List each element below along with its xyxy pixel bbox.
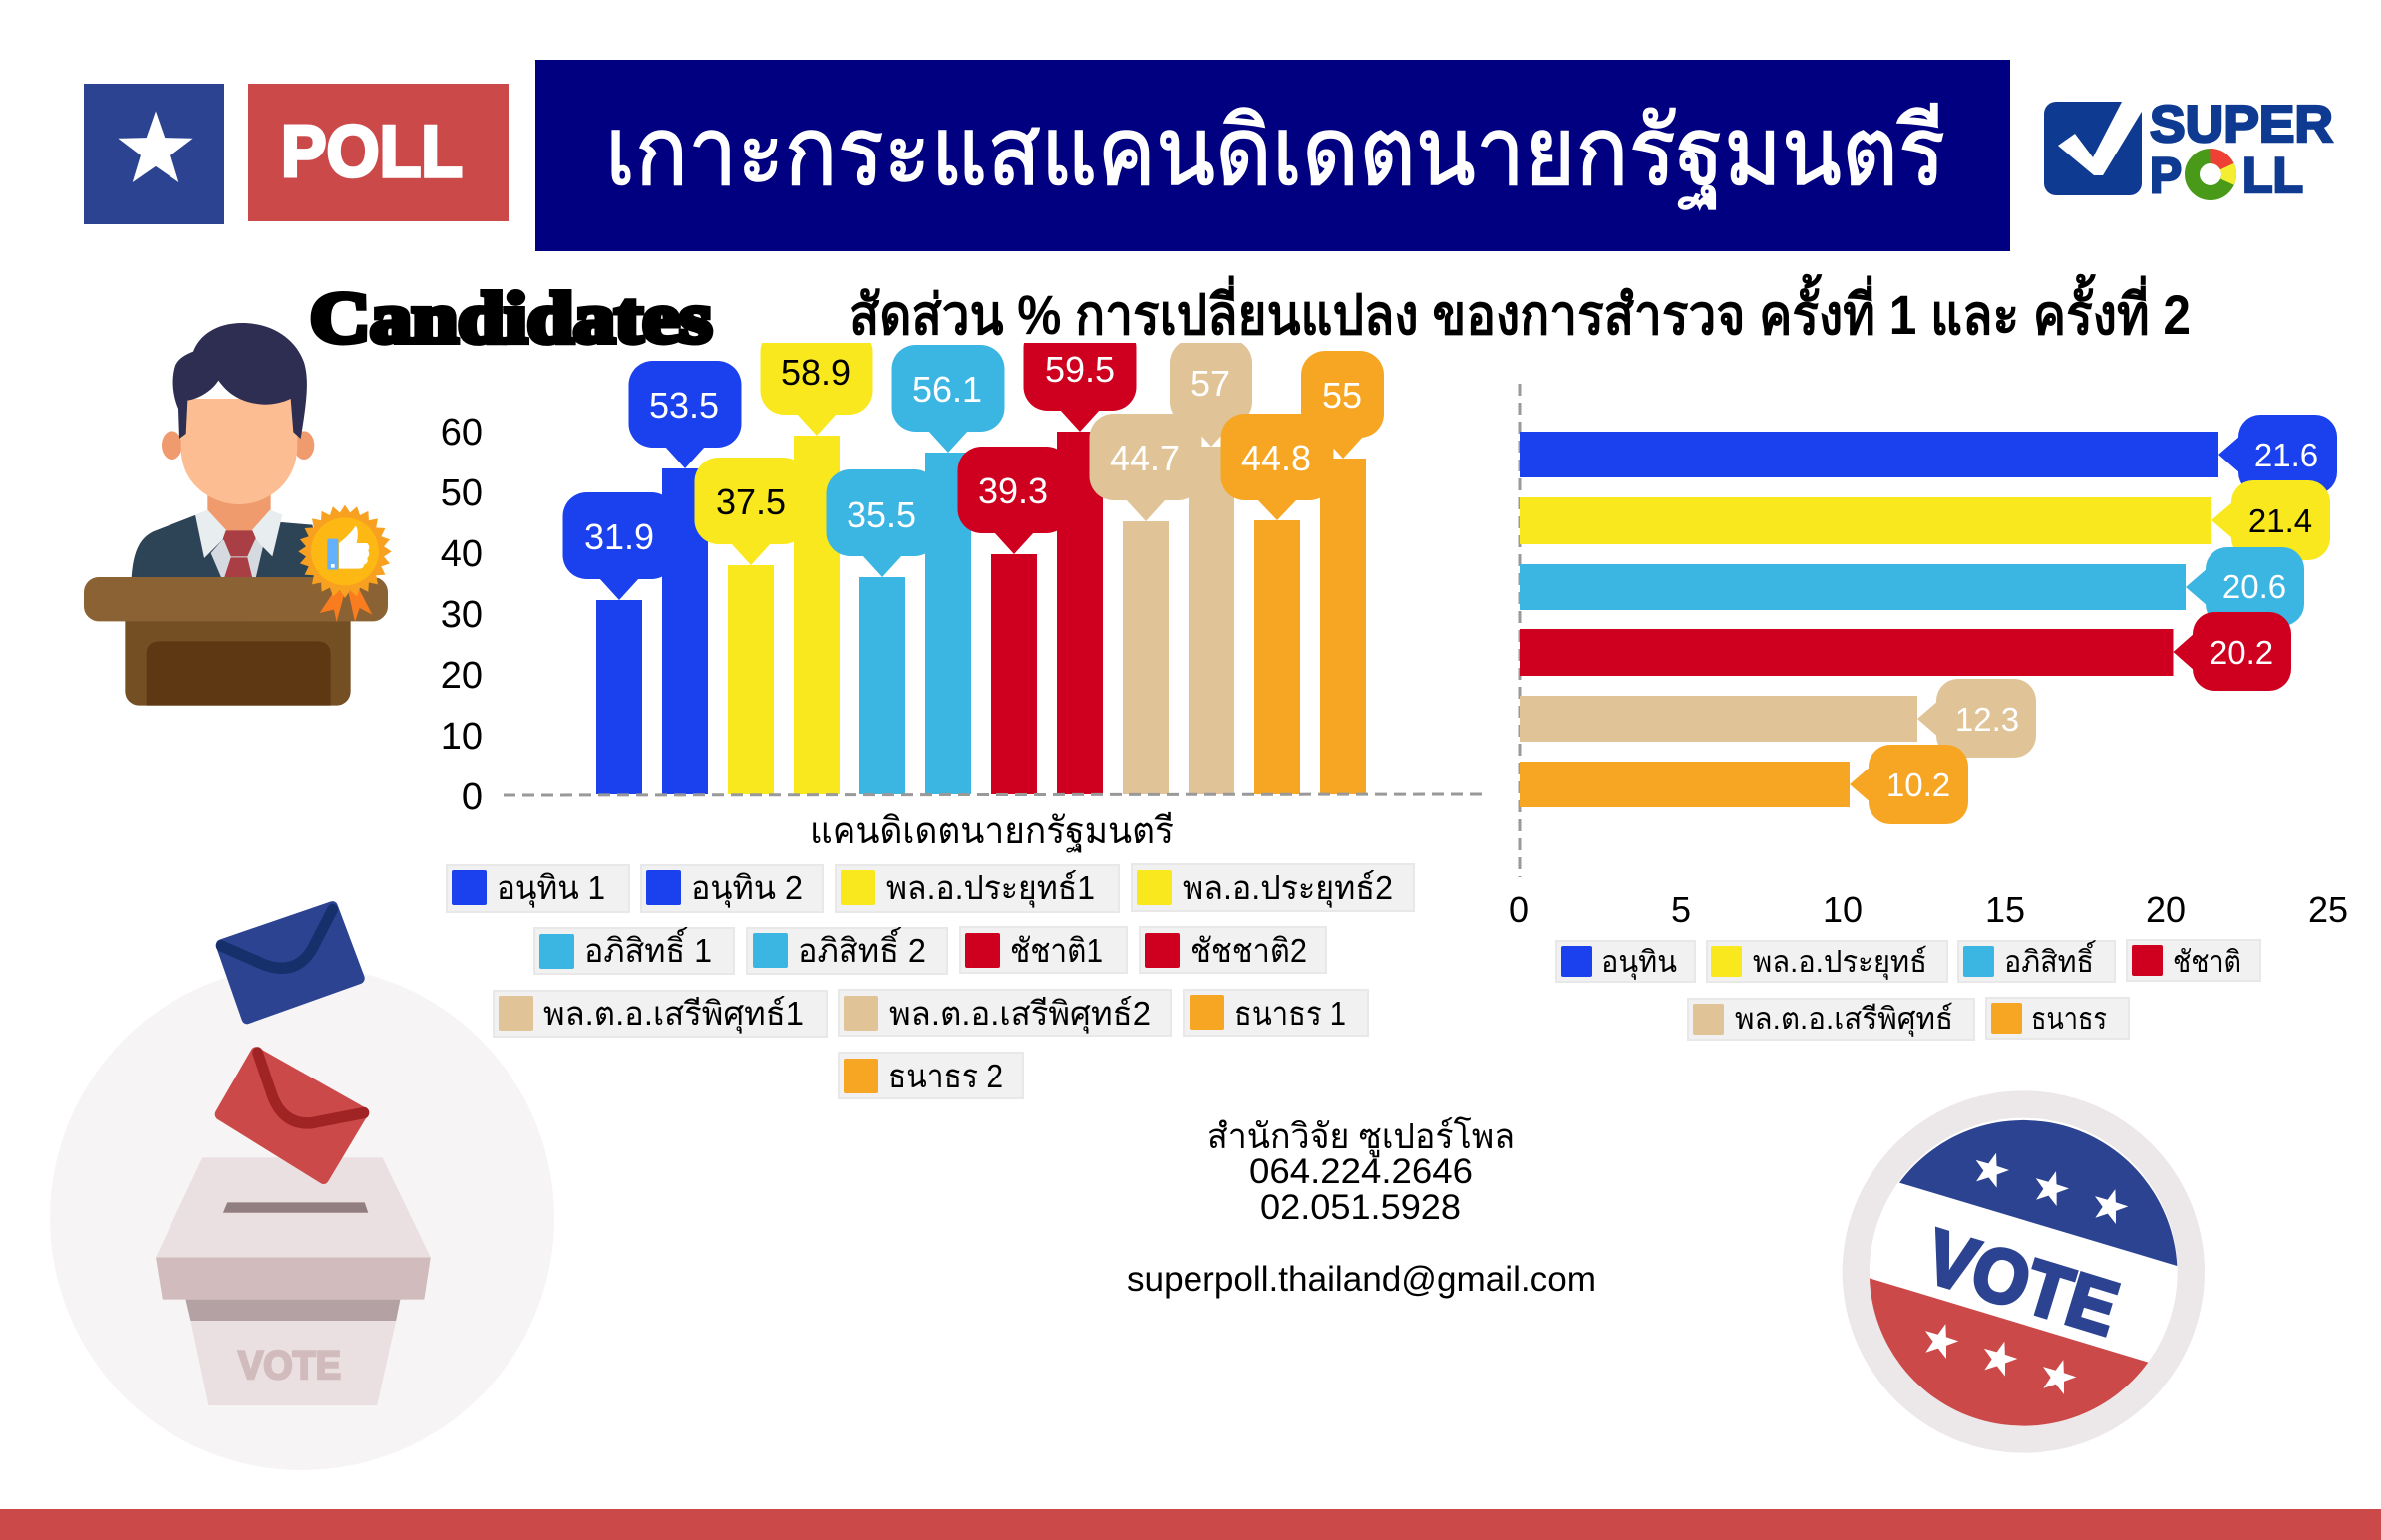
logo: super poll: SUPER (2150, 96, 2333, 154)
bar: Seripisut 1: 44.7 (1110, 438, 1180, 478)
bar: Thanathorn 2: 55 (1322, 375, 1362, 416)
heading: Candidates: Candidates (310, 278, 712, 358)
chart axis: column baseline and values: 30 (441, 594, 483, 636)
legend item: Anutin: อนุทิน (1601, 946, 1677, 981)
bar: Thanathorn 1: 44.8 (1241, 438, 1311, 478)
legend item: Seripisut 2: พล.ต.อ.เสรีพิศุทธ์2 (889, 995, 1151, 1034)
horizontal bar: Abhisit: 20.6 (2222, 568, 2286, 605)
legend item: Thanathorn 2: ธนาธร 2 (888, 1058, 1003, 1094)
legend item: Prayut (1707, 941, 1947, 982)
title banner (535, 60, 2010, 251)
badge: star poll box (84, 84, 224, 224)
legend item: Chadchart 1: ชัชาติ1 (1010, 932, 1103, 969)
legend item: Chadchart: ชัชาติ (2173, 946, 2241, 979)
icon: vote badge: VOTE (1916, 1214, 2127, 1352)
horizontal bar: Abhisit (1520, 547, 2304, 626)
legend item: Abhisit: อภิสิทธิ์ (2004, 940, 2097, 979)
footer bar (0, 1509, 2381, 1540)
horizontal bar: Thanathorn (1520, 745, 1968, 824)
horizontal bar: Seripisut: 12.3 (1955, 701, 2019, 738)
legend item: Prayut 1: พล.อ.ประยุทธ์1 (886, 869, 1095, 908)
chart axis: horizontal values (1509, 889, 2348, 930)
bar: Chadchart 1: 39.3 (978, 470, 1048, 511)
bar: Prayut 1: 37.5 (716, 481, 786, 522)
bar: Chadchart 1 (957, 447, 1057, 794)
logo: super poll: P (2150, 148, 2182, 203)
legend item: Thanathorn: ธนาธร (2031, 1003, 2107, 1036)
badge: POLL label (248, 84, 509, 221)
legend item: Thanathorn (1986, 998, 2129, 1039)
bar: Chadchart 2: 59.5 (1045, 349, 1115, 390)
contact block (1127, 1116, 1596, 1299)
icon: ballot box with envelopes: VOTE (238, 1344, 341, 1387)
horizontal bar: Anutin: 21.6 (2254, 437, 2318, 473)
legend item: Abhisit 2: อภิสิทธิ์ 2 (798, 927, 926, 969)
chart axis: column baseline and values: 10 (441, 716, 483, 758)
legend item: Prayut 2: พล.อ.ประยุทธ์2 (1183, 869, 1393, 908)
legend item: Abhisit 1 (534, 927, 734, 974)
chart axis: horizontal values: 25 (2308, 889, 2348, 930)
title banner: เกาะกระแสแคนดิเดตนายกรัฐมนตรี (605, 99, 1945, 210)
legend item: Chadchart (2127, 940, 2260, 981)
legend item: Chadchart 1 (960, 927, 1127, 973)
bar: Anutin 2: 53.5 (649, 385, 719, 426)
legend item: Seripisut: พล.ต.อ.เสรีพิศุทธ์ (1735, 1002, 1953, 1038)
icon: candidate at podium (84, 323, 392, 706)
legend item: Abhisit 1: อภิสิทธิ์ 1 (584, 927, 712, 969)
legend item: Anutin 1: อนุทิน 1 (497, 869, 605, 908)
chart axis: horizontal values: 5 (1671, 889, 1691, 930)
legend item: Thanathorn 1: ธนาธร 1 (1234, 995, 1346, 1032)
chart: change horizontal bars (1520, 384, 2337, 877)
legend item: Anutin (1556, 941, 1695, 982)
horizontal bar: Chadchart: 20.2 (2210, 634, 2273, 671)
bar: Prayut 1 (694, 458, 794, 794)
horizontal bar: Prayut: 21.4 (2248, 502, 2312, 539)
legend item: Anutin 2 (641, 865, 823, 912)
legend item: Chadchart 2: ชัชชาติ2 (1190, 932, 1307, 969)
chart axis: horizontal values: 10 (1823, 889, 1863, 930)
chart axis: column baseline and values (441, 412, 1486, 818)
horizontal bar: Seripisut (1520, 679, 2036, 758)
bar: Thanathorn 1 (1220, 414, 1334, 794)
badge: POLL label: POLL (281, 112, 463, 192)
bar: Abhisit 1: 35.5 (847, 494, 916, 535)
bar: Anutin 1: 31.9 (584, 516, 654, 557)
bar: Abhisit 2: 56.1 (912, 369, 982, 410)
axis title: prime minister candidates: แคนดิเดตนายกรัฐมนตรี (810, 810, 1174, 853)
horizontal bar: Chadchart (1520, 612, 2291, 691)
legend item: Abhisit (1958, 940, 2115, 982)
logo: super poll (2044, 96, 2333, 203)
bar: Abhisit 2 (891, 345, 1005, 794)
legend item: Seripisut 2 (839, 990, 1171, 1036)
bar: Seripisut 1 (1089, 414, 1202, 794)
bar: Anutin 2 (628, 361, 742, 794)
icon: ballot box background circle (50, 966, 554, 1470)
contact block: 02.051.5928 (1260, 1188, 1461, 1227)
chart axis: horizontal values: 0 (1509, 889, 1529, 930)
bar: Chadchart 2 (1023, 324, 1137, 794)
legend item: Prayut: พล.อ.ประยุทธ์ (1753, 945, 1927, 981)
bar: Prayut 2 (760, 328, 873, 794)
legend item: Thanathorn 1 (1184, 990, 1368, 1036)
contact block: 064.224.2646 (1249, 1152, 1473, 1191)
chart axis: column baseline and values: 0 (462, 776, 483, 818)
bar: Seripisut 2 (1170, 339, 1252, 794)
legend item: Prayut 2 (1132, 864, 1414, 911)
heading: change in percentage between survey rounds: สัดส่วน % การเปลี่ยนแปลง ของการสำรวจ ครั้งที่ 1 และ ครั้งที่ 2 (850, 274, 2191, 346)
legend item: Prayut 1 (836, 865, 1119, 912)
legend item: Seripisut 1 (494, 991, 827, 1037)
chart: first and second survey columns (562, 324, 1384, 794)
legend: horizontal chart (1556, 940, 2260, 1040)
chart axis: column baseline and values: 60 (441, 412, 483, 454)
legend item: Seripisut (1688, 999, 1974, 1040)
bar: Seripisut 2: 57 (1190, 363, 1230, 404)
legend item: Anutin 1 (447, 865, 629, 912)
legend item: Anutin 2: อนุทิน 2 (691, 869, 803, 908)
bar: Prayut 2: 58.9 (781, 352, 850, 393)
bar: Thanathorn 2 (1301, 351, 1384, 794)
chart axis: column baseline and values: 50 (441, 472, 483, 514)
icon: vote badge (1843, 1090, 2205, 1453)
legend item: Thanathorn 2 (839, 1053, 1023, 1098)
horizontal bar: Anutin (1520, 415, 2337, 494)
legend item: Abhisit 2 (747, 927, 947, 974)
contact block: superpoll.thailand@gmail.com (1127, 1260, 1596, 1299)
bar: Anutin 1 (562, 492, 662, 794)
contact block: สำนักวิจัย ซูเปอร์โพล (1207, 1116, 1515, 1157)
horizontal bar: Thanathorn: 10.2 (1886, 767, 1950, 803)
logo: super poll: LL (2242, 148, 2303, 203)
legend: column chart (447, 864, 1414, 1098)
chart axis: horizontal values: 20 (2146, 889, 2186, 930)
horizontal bar: Prayut (1520, 480, 2330, 560)
icon: ballot box with envelopes (156, 907, 431, 1405)
chart axis: horizontal values: 15 (1985, 889, 2025, 930)
chart axis: column baseline and values: 20 (441, 655, 483, 697)
legend item: Seripisut 1: พล.ต.อ.เสรีพิศุทธ์1 (543, 995, 804, 1034)
legend item: Chadchart 2 (1140, 927, 1326, 973)
chart axis: column baseline and values: 40 (441, 533, 483, 575)
bar: Abhisit 1 (826, 469, 925, 794)
